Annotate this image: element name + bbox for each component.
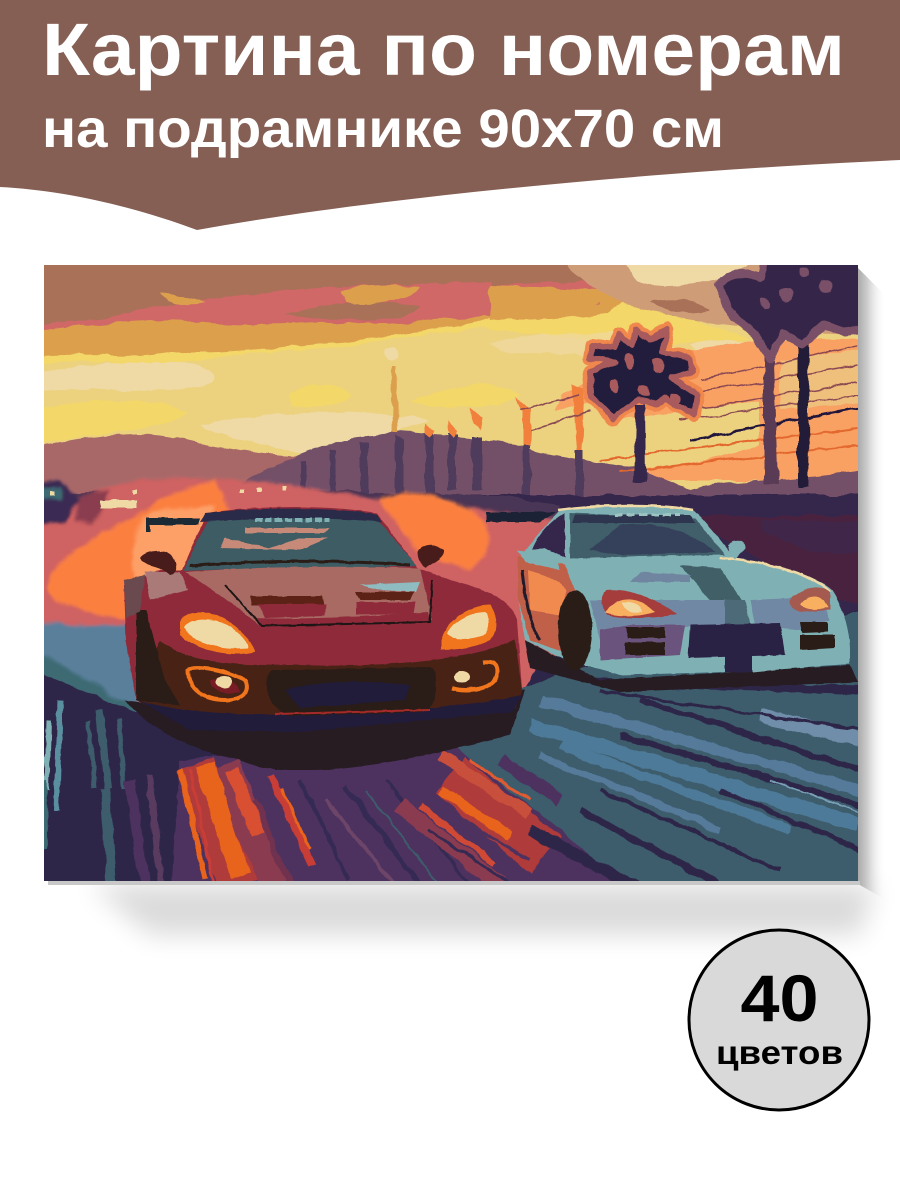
subtitle: на подрамнике 90x70 см — [42, 99, 724, 159]
hood — [185, 567, 432, 627]
hood stripe — [680, 565, 742, 600]
side — [518, 556, 575, 655]
badge: 40 colours: 40 — [740, 961, 818, 1035]
hood highlight — [720, 558, 830, 592]
body — [518, 506, 850, 675]
body — [124, 507, 522, 728]
hood vents — [250, 592, 415, 605]
grille — [688, 623, 785, 658]
mirrors — [140, 551, 176, 575]
windshield — [570, 513, 725, 559]
right headlight — [441, 605, 496, 650]
fence and distant wall — [72, 366, 858, 519]
palm trees large — [714, 265, 858, 488]
side panel — [124, 575, 145, 618]
road streaks — [44, 682, 860, 890]
rear wing — [486, 512, 556, 522]
cars — [124, 506, 858, 771]
ground shadow — [125, 690, 525, 771]
left headlight — [180, 612, 255, 654]
sky — [44, 265, 858, 490]
badge: 40 colours: цветов — [716, 1034, 843, 1071]
fog lights — [188, 668, 247, 700]
header banner — [0, 0, 900, 230]
distant headlights — [49, 486, 286, 508]
bonnet line — [225, 580, 432, 626]
vents — [625, 622, 835, 655]
blue streaks — [540, 700, 860, 790]
red car — [124, 507, 525, 771]
rear wing — [146, 518, 200, 532]
road — [44, 612, 858, 881]
right headlight — [790, 587, 830, 612]
lower body dark — [136, 640, 522, 715]
front fascia — [590, 600, 725, 640]
lower lip — [752, 666, 816, 672]
left headlight — [602, 590, 677, 618]
painting: two racing cars at sunset — [44, 265, 858, 881]
mountains — [44, 434, 298, 494]
grille — [267, 667, 436, 716]
wall right — [700, 514, 858, 604]
palm tree small — [590, 328, 698, 482]
badge: 40 colours — [689, 930, 869, 1110]
orange reflection — [195, 765, 240, 885]
base fill — [548, 520, 858, 614]
car shadow — [525, 640, 858, 692]
roof highlight — [558, 506, 693, 510]
windshield — [183, 514, 417, 571]
fence wires — [520, 345, 858, 472]
right reflection — [450, 775, 545, 855]
mirror — [728, 541, 746, 560]
silver car — [486, 506, 858, 692]
smoke behind cars — [20, 478, 570, 722]
wheel — [558, 590, 592, 670]
title: Картина по номерам — [42, 8, 845, 91]
side window — [532, 513, 565, 558]
canvas shadow — [48, 268, 886, 935]
